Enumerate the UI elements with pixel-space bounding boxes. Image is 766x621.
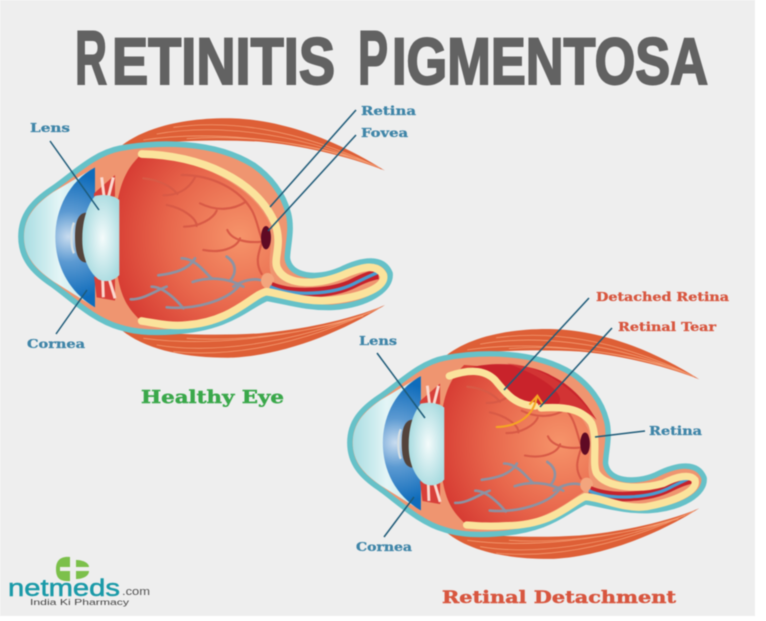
logo: netmeds: .com bbox=[122, 586, 150, 598]
logo: netmeds bbox=[8, 557, 150, 607]
leader lines bbox=[50, 110, 645, 537]
label: Retinal Tear: Retinal Tear bbox=[618, 319, 716, 334]
label: Retina (detached): Retina bbox=[649, 423, 702, 438]
title: P bbox=[358, 16, 388, 101]
label: Lens (healthy): Lens bbox=[30, 120, 70, 135]
title bbox=[75, 16, 708, 101]
detached eye diagram bbox=[350, 329, 704, 559]
icon: green cross bbox=[56, 557, 89, 581]
subretinal dark region bbox=[450, 364, 597, 420]
heading: Healthy Eye: Healthy Eye bbox=[141, 387, 284, 408]
label: Cornea (detached): Cornea bbox=[356, 539, 412, 554]
label: Fovea: Fovea bbox=[361, 125, 408, 140]
detached retina band bbox=[449, 371, 695, 526]
label: Detached Retina: Detached Retina bbox=[596, 289, 729, 304]
logo: netmeds: netmeds bbox=[8, 575, 120, 602]
title: ETINITIS bbox=[112, 24, 335, 98]
healthy retina bbox=[142, 154, 384, 325]
label: Cornea (healthy): Cornea bbox=[27, 336, 85, 351]
title: R bbox=[75, 16, 107, 101]
healthy eye diagram bbox=[21, 118, 390, 358]
logo: netmeds: India Ki Pharmacy bbox=[30, 597, 130, 607]
label: Retina (healthy): Retina bbox=[361, 103, 416, 118]
heading: Retinal Detachment: Retinal Detachment bbox=[442, 588, 676, 608]
detached region and retina bbox=[449, 363, 695, 526]
icon: tear arrow bbox=[497, 396, 543, 427]
label: Lens (detached): Lens bbox=[359, 333, 397, 348]
